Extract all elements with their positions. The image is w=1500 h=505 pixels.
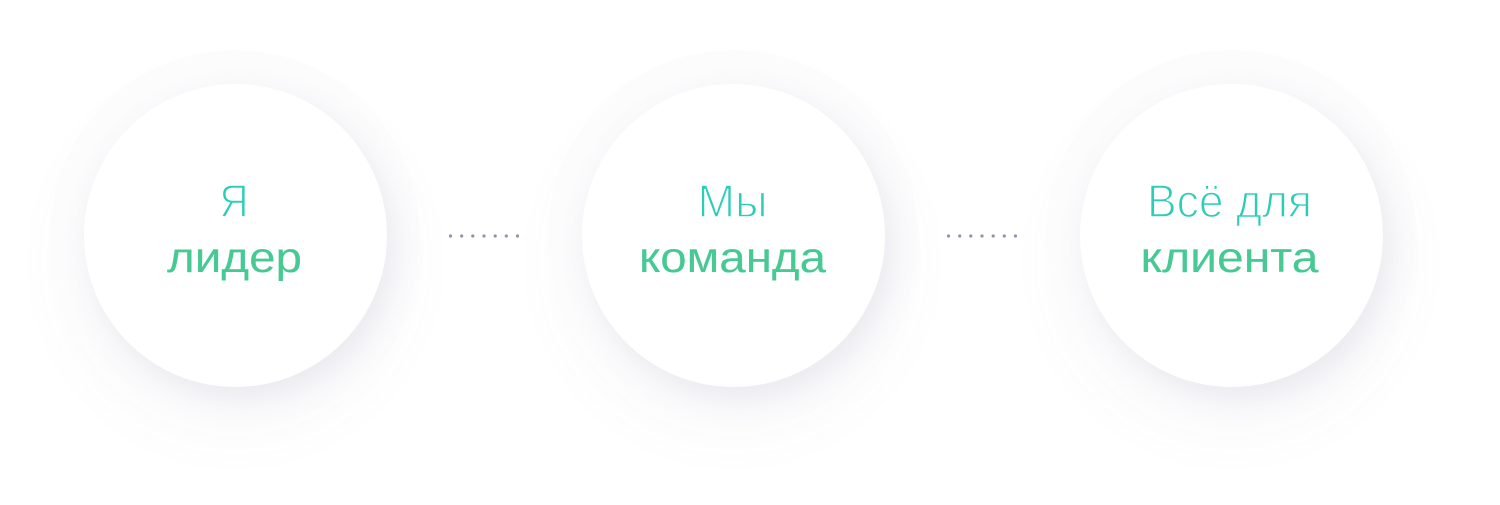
text: клиента: клиента [1140,234,1319,282]
connector dots 2 [946,234,1017,238]
outer glow ring [50,50,420,420]
panel: Всё для клиента [1079,102,1398,407]
text: Я: Я [220,175,248,227]
white circle [84,84,387,387]
connector dots 1 [448,234,520,238]
outer glow ring [1046,50,1416,420]
text: Всё для: Всё для [1147,175,1312,227]
outer glow ring [548,50,918,420]
circle text [167,175,302,282]
text: лидер: лидер [167,234,302,282]
circle text [639,175,826,282]
white circle [582,84,885,387]
text: команда: команда [639,234,826,282]
panel: Мы команда [581,102,900,407]
circle text [1140,175,1319,282]
text: Мы: Мы [698,175,768,227]
white circle [1080,84,1383,387]
panel: Я лидер [83,102,402,407]
